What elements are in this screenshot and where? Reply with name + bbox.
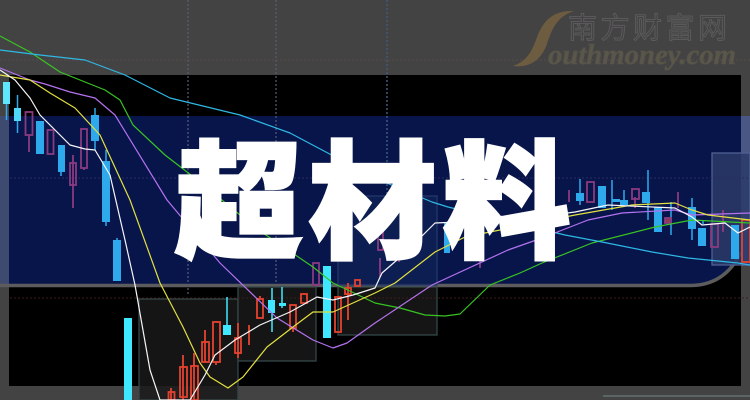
candlesticks: cyan and blue falling	[3, 82, 739, 281]
title: 超材料	[175, 133, 570, 275]
band left edge	[0, 116, 9, 284]
candlesticks: cyan falling in black zone	[124, 266, 331, 400]
vertical and horizontal dashed grid lines	[0, 0, 750, 298]
watermark swoosh S	[513, 11, 574, 66]
watermark chinese name: 南方财富网	[568, 5, 731, 47]
moving average: purple	[0, 68, 750, 348]
watermark url: outhmoney.com	[548, 39, 736, 71]
bottom right scroll bar	[603, 395, 750, 397]
black chart panel	[9, 75, 741, 386]
shaded chart ranges	[139, 153, 750, 400]
band lower border	[0, 252, 741, 286]
candlesticks: purple rising in navy zone	[26, 112, 723, 285]
watermark logo	[513, 5, 736, 71]
moving average: green	[0, 36, 750, 316]
moving average: blue	[0, 50, 750, 265]
candlesticks: red rising in black zone	[168, 220, 750, 400]
navy title band	[0, 116, 741, 284]
moving average: yellow	[0, 75, 750, 388]
band right edge	[741, 116, 750, 266]
